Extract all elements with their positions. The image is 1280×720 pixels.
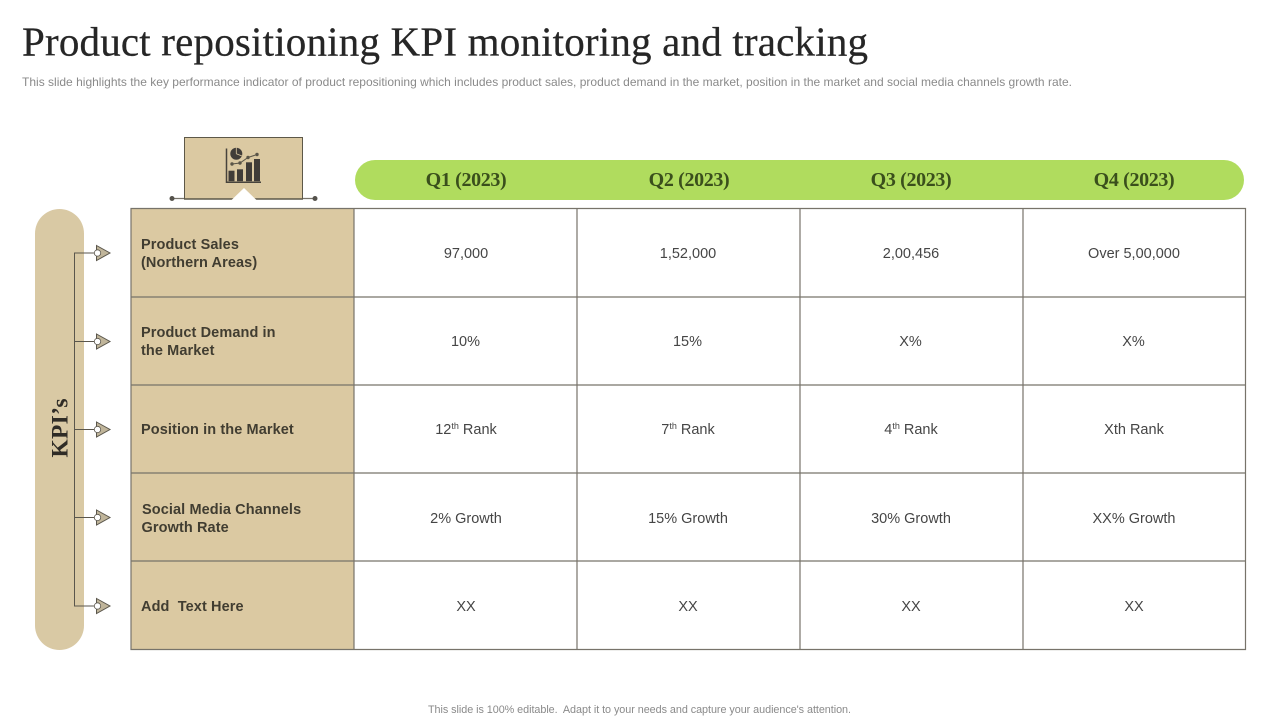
row values: Add Text: XX xyxy=(1124,599,1144,615)
row values: Position xyxy=(435,421,1165,438)
row values: Add Text: XX xyxy=(901,599,921,615)
row values: Product Demand: 15% xyxy=(673,334,702,350)
row values: Add Text: XX xyxy=(456,599,476,615)
row values: Product Sales: 97,000 xyxy=(444,246,488,262)
heading: Q2: Q2 (2023) xyxy=(649,169,729,191)
heading: Q3: Q3 (2023) xyxy=(871,169,951,191)
row values: Product Sales: 1,52,000 xyxy=(660,246,716,262)
row label: Social Media: Social Media Channels xyxy=(142,502,301,518)
quarter header bar xyxy=(355,160,1244,200)
row values: Product Sales: Over 5,00,000 xyxy=(1088,246,1180,262)
row values: Position: Rank xyxy=(459,422,498,438)
row values: Product Demand xyxy=(451,334,1145,350)
row values: Product Sales: 2,00,456 xyxy=(883,246,939,262)
icon: bar chart with pie xyxy=(226,148,261,182)
KPI's vertical pill: KPI’s xyxy=(48,398,74,458)
row values: Product Demand: X% xyxy=(899,334,922,350)
arrow: row 1 xyxy=(94,246,110,260)
row label: Social Media: Growth Rate xyxy=(142,520,229,536)
row values: Position: 4 xyxy=(884,422,892,438)
row values: Position: 12 xyxy=(435,422,451,438)
row values: Position: Rank xyxy=(900,422,938,438)
icon panel: KPI chart card xyxy=(170,138,318,201)
row values: Add Text xyxy=(456,599,1144,615)
row values: Add Text: XX xyxy=(678,599,698,615)
row values: Social Media xyxy=(430,511,1176,527)
arrow: row 2 xyxy=(94,334,110,349)
row values: Product Demand: X% xyxy=(1122,334,1145,350)
row label: Product Demand: the Market xyxy=(141,343,215,359)
row values: Social Media: 2% Growth xyxy=(430,511,502,527)
row values: Social Media: 15% Growth xyxy=(648,511,728,527)
row values: Position: Xth Rank xyxy=(1104,422,1165,438)
row values: Product Demand: 10% xyxy=(451,334,480,350)
row label: Product Demand: Product Demand in xyxy=(141,325,276,341)
KPI's vertical pill xyxy=(35,209,84,650)
row label: Product Sales: Product Sales xyxy=(141,237,239,253)
row values: Position: th xyxy=(892,421,900,431)
row values: Product Sales xyxy=(444,246,1180,262)
row label: Add Text: Add Text Here xyxy=(141,599,244,615)
row values: Position: th xyxy=(451,421,459,431)
KPI table xyxy=(131,208,1246,650)
title: Product repositioning KPI monitoring and tracking xyxy=(22,18,868,64)
heading: Q4: Q4 (2023) xyxy=(1094,169,1174,191)
footer note: This slide is 100% editable. Adapt it to your needs and capture your audience's attention. xyxy=(428,704,851,716)
connector tree with arrows xyxy=(74,246,110,614)
row values: Social Media: 30% Growth xyxy=(871,511,951,527)
arrow: row 5 xyxy=(94,598,110,614)
arrow: row 4 xyxy=(94,510,110,525)
row values: Position: 7 xyxy=(661,422,669,438)
row values: Social Media: XX% Growth xyxy=(1092,511,1176,527)
row label: Product Sales: (Northern Areas) xyxy=(141,255,257,271)
arrow: row 3 xyxy=(94,422,110,437)
subtitle: This slide highlights the key performance indicator of product repositioning which includes product sales, product demand in the market, position in the market and social media channels growth rate. xyxy=(22,75,1072,89)
row values: Position: Rank xyxy=(677,422,715,438)
heading: Q1: Q1 (2023) xyxy=(426,169,506,191)
row label: Position: Position in the Market xyxy=(141,422,294,438)
row values: Position: th xyxy=(669,421,677,431)
